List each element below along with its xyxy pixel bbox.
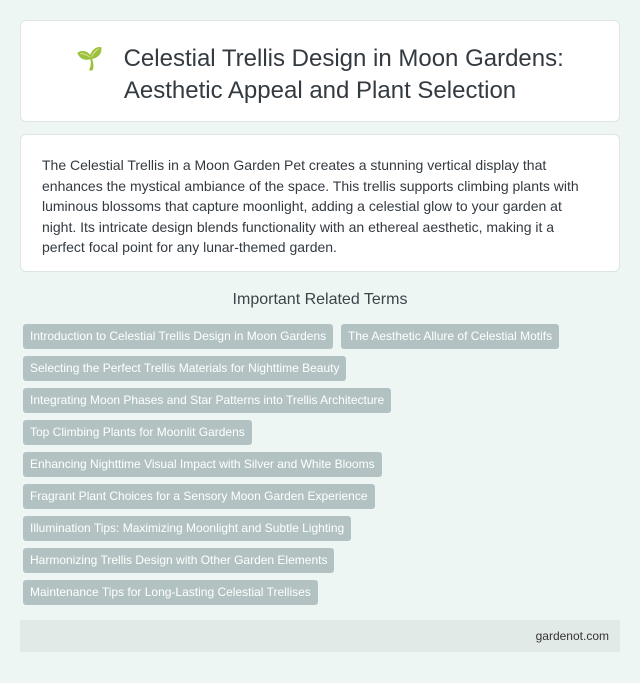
- text: Integrating Moon Phases and Star Patterns into Trellis Architecture: [30, 393, 384, 407]
- text: The Aesthetic Allure of Celestial Motifs: [348, 329, 552, 343]
- text: Illumination Tips: Maximizing Moonlight and Subtle Lighting: [30, 521, 344, 535]
- footer: gardenot.com: [536, 629, 609, 643]
- description text: The Celestial Trellis in a Moon Garden Pet creates a stunning vertical display that enhances the mystical ambiance of the space. This trellis supports climbing plants with luminous blossoms that capture moonlight, adding a celestial glow to your garden at night. Its intricate design blends functionality with an ethereal aesthetic, making it a perfect focal point for any lunar-themed garden.: [42, 157, 579, 255]
- footer: [20, 620, 620, 652]
- text: Maintenance Tips for Long-Lasting Celestial Trellises: [30, 585, 311, 599]
- title heading: [76, 45, 564, 104]
- section heading: Important Related Terms: [233, 291, 407, 308]
- text: Selecting the Perfect Trellis Materials for Nighttime Beauty: [30, 361, 339, 375]
- text: Top Climbing Plants for Moonlit Gardens: [30, 425, 245, 439]
- description card: [20, 134, 620, 272]
- tag list: [23, 324, 559, 605]
- title heading: Aesthetic Appeal and Plant Selection: [124, 77, 516, 104]
- title heading: 🌱 Celestial Trellis Design in Moon Gardens:: [76, 45, 564, 72]
- text: Introduction to Celestial Trellis Design in Moon Gardens: [30, 329, 326, 343]
- title card: [20, 20, 620, 122]
- text: Harmonizing Trellis Design with Other Garden Elements: [30, 553, 327, 567]
- text: Fragrant Plant Choices for a Sensory Moon Garden Experience: [30, 489, 368, 503]
- text: Enhancing Nighttime Visual Impact with Silver and White Blooms: [30, 457, 375, 471]
